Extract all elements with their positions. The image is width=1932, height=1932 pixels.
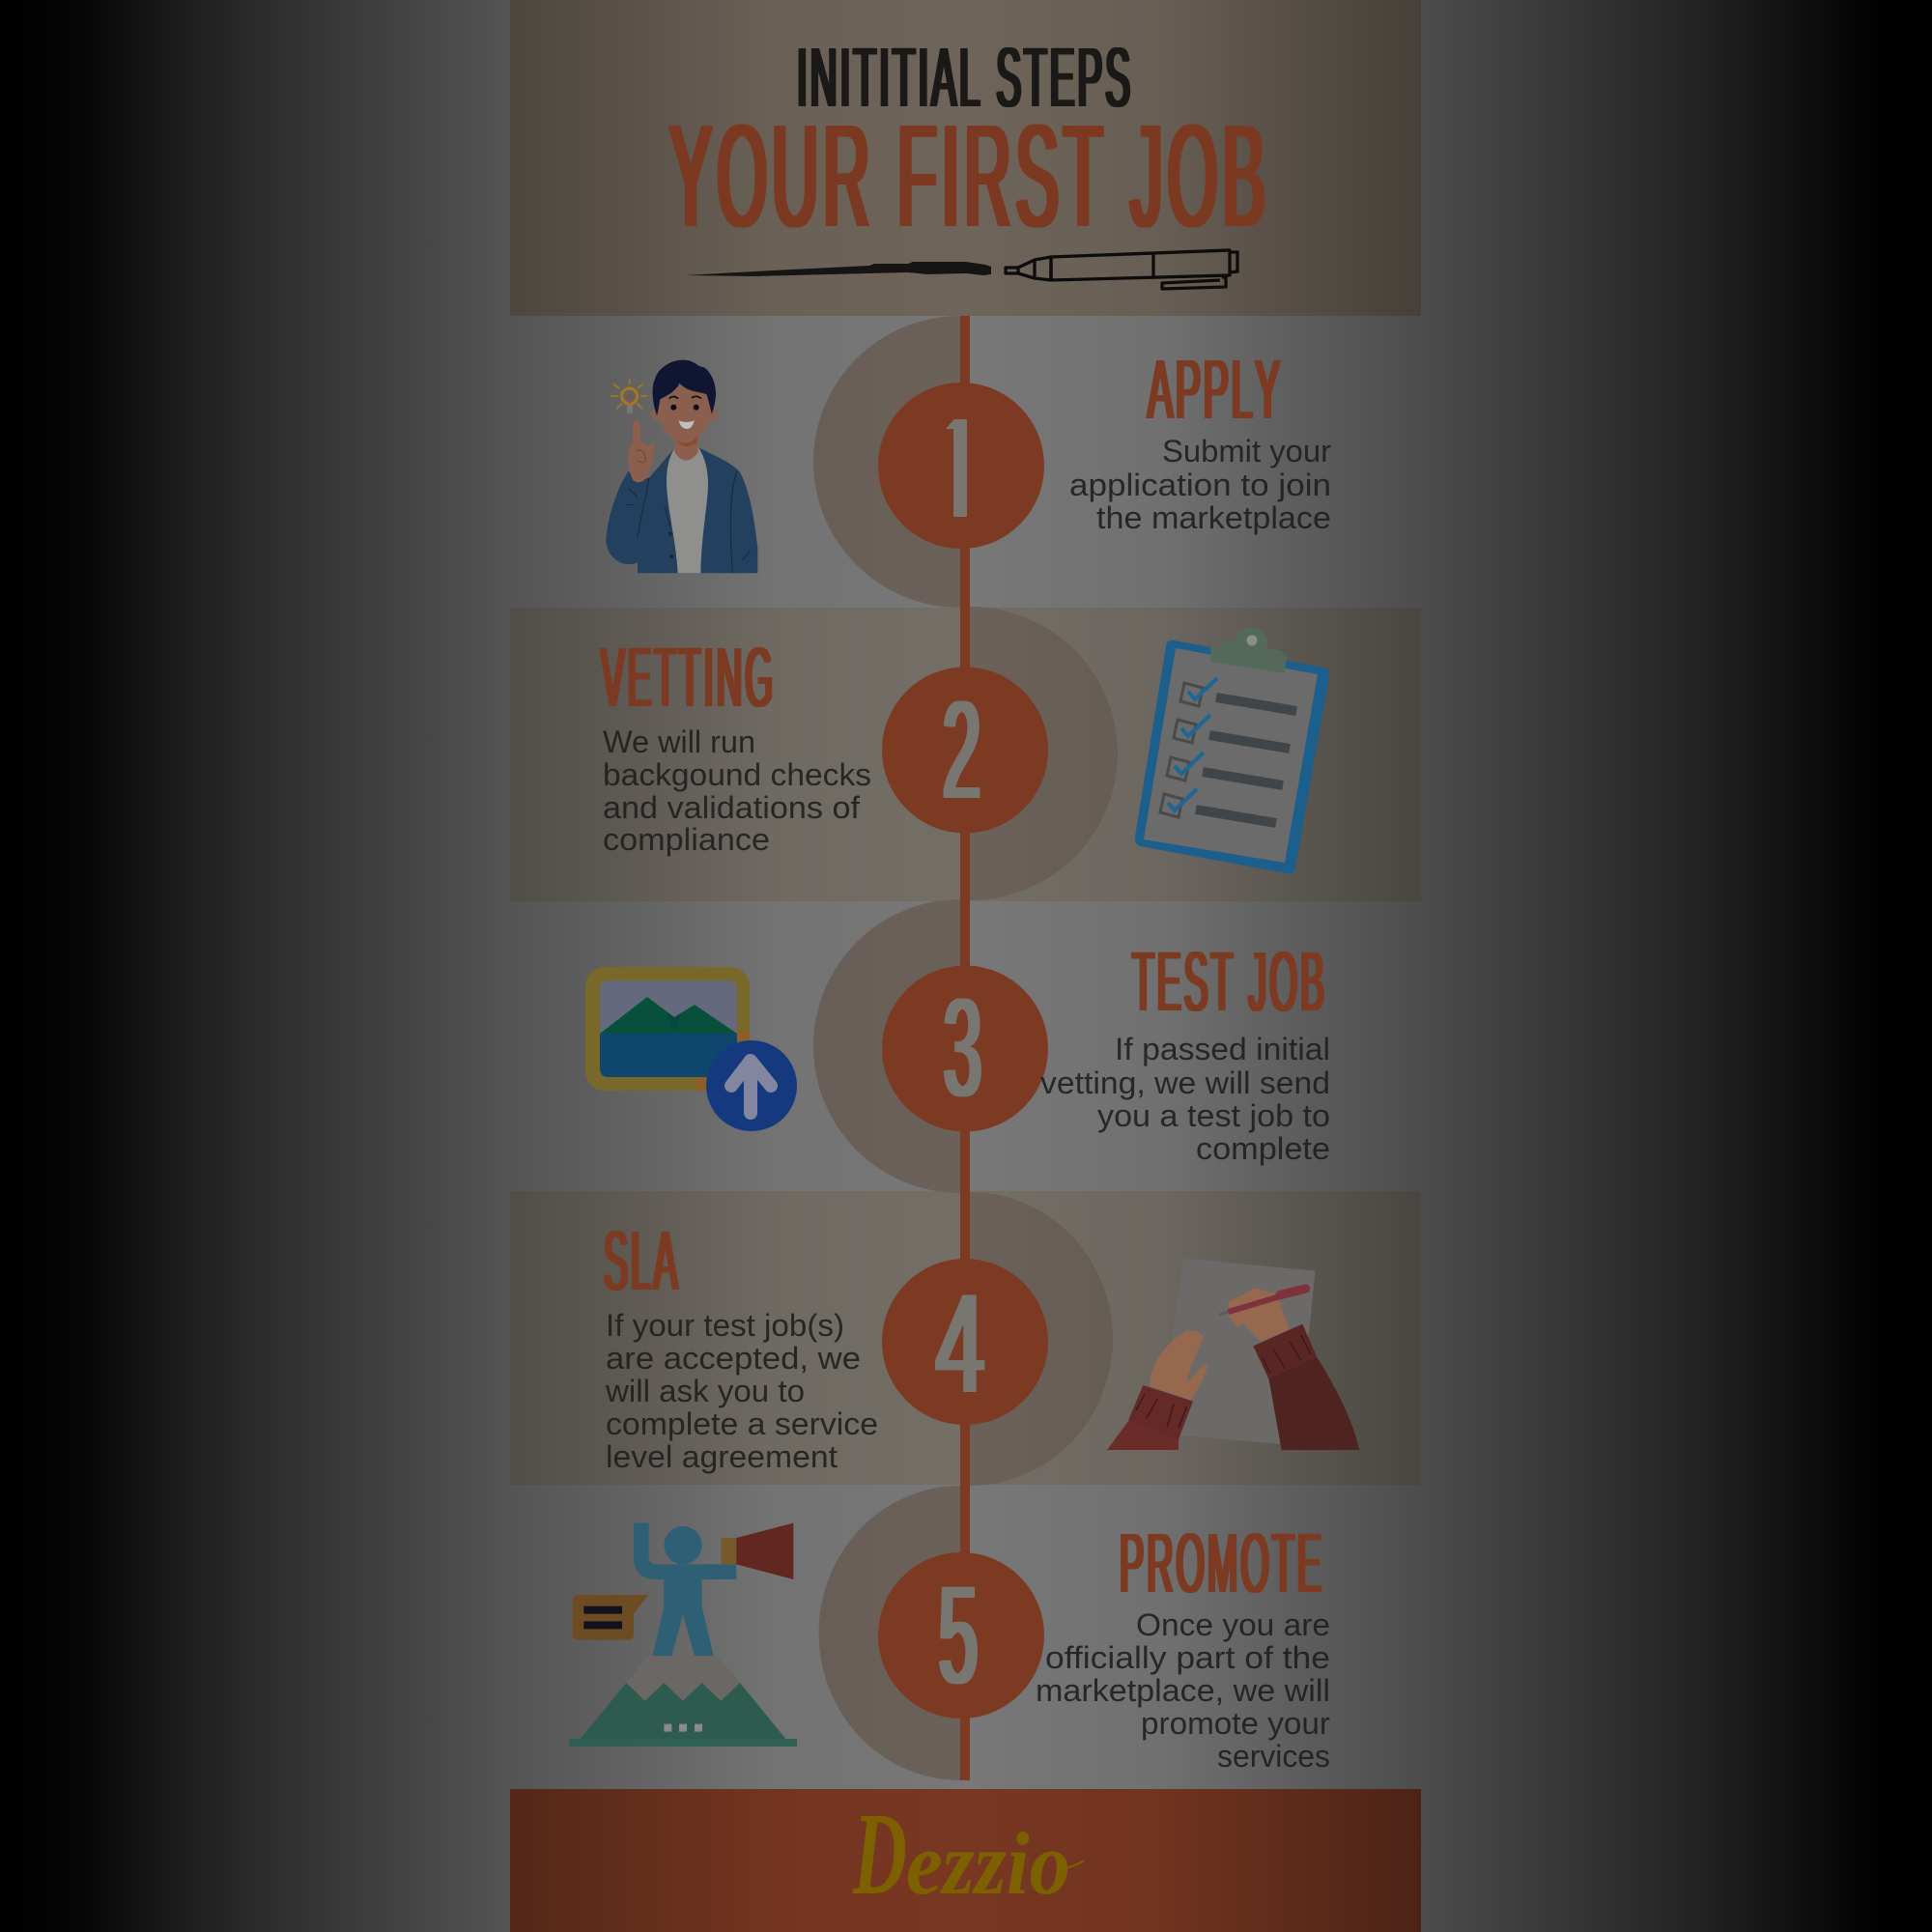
half circle step 1 [813,316,960,608]
step 4 text: will ask you to [605,1374,805,1408]
step 5 text: Once you are [1136,1607,1330,1642]
text: SLA [604,1214,680,1308]
step 4 number: 4 [936,1264,984,1422]
step 5 text: marketplace, we will [1036,1673,1330,1708]
step 2 number [882,667,1048,833]
step 1 text: application to join [1069,468,1331,502]
step 2 text: and validations of [603,790,860,825]
panel: step 5 band [510,1485,1421,1789]
panel: header band [510,0,1421,316]
footer logo: ezzio [906,1814,1070,1913]
icon: man with idea [606,360,757,573]
step 3 text: you a test job to [1097,1098,1330,1133]
step 1 number: 1 [935,389,982,548]
half circle step 2 [970,607,1118,900]
icon: person with megaphone on mountain [569,1523,797,1747]
step 5 text: promote your [1141,1706,1330,1741]
half circle step 4 [970,1192,1113,1486]
step 4 text: level agreement [606,1439,838,1474]
step 4 text: complete a service [606,1406,878,1441]
step 3 number [882,966,1048,1132]
footer logo [852,1789,1084,1919]
panel: step 1 band [510,316,1421,608]
step 4 text: are accepted, we [606,1341,861,1376]
panel: step 2 band [510,608,1421,901]
step 2 text: backgound checks [603,757,871,792]
step 2 text: We will run [603,724,755,759]
icon: hands writing [1107,1259,1359,1450]
step 5 number [878,1552,1044,1719]
step 4 text [605,1308,878,1474]
panel: step 3 band [510,901,1421,1191]
step 5 text: officially part of the [1045,1640,1330,1675]
step 3 text: vetting, we will send [1040,1065,1330,1100]
text: TEST JOB [1132,935,1327,1029]
icon: brush stroke [686,262,991,276]
step 3 text [1040,1032,1330,1166]
half circle step 5 [819,1486,960,1780]
half circle step 3 [813,899,960,1193]
step 5 number: 5 [939,1557,978,1713]
step 1 text: the marketplace [1096,500,1331,535]
step 1 text [1069,434,1331,535]
step 2 text: compliance [603,822,770,857]
step 4 text: If your test job(s) [606,1308,844,1343]
text: VETTING [601,631,776,724]
panel: step 4 band [510,1191,1421,1485]
icon: image upload [585,967,797,1131]
text: APPLY [1148,343,1283,437]
text: PROMOTE [1120,1517,1324,1610]
step 5 text: services [1217,1739,1330,1774]
icon: marker pen [1006,250,1237,289]
step 4 number [882,1259,1048,1425]
icon: checklist clipboard [1135,627,1329,873]
step 2 number: 2 [943,672,980,828]
step 3 text: If passed initial [1115,1032,1330,1066]
step 2 text [603,724,871,857]
timeline line [960,316,970,1780]
step 1 number [878,383,1044,549]
panel: footer band [510,1789,1421,1932]
footer logo: D [852,1789,907,1919]
text: INITITIAL STEPS [797,31,1133,125]
step 5 text [1036,1607,1330,1774]
step 1 text: Submit your [1162,434,1331,469]
step 3 text: complete [1196,1131,1330,1166]
step 3 number: 3 [944,970,981,1125]
